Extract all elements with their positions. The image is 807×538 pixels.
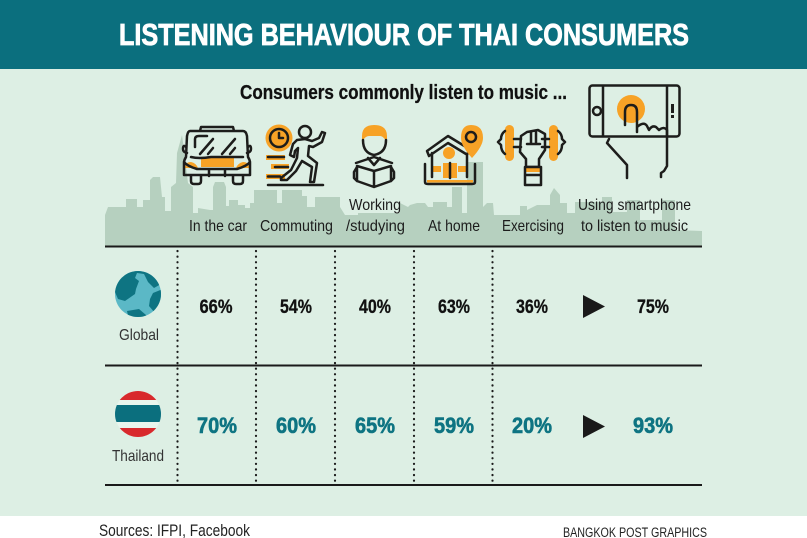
label: thailand: Thailand	[112, 448, 164, 465]
global values row	[200, 297, 669, 318]
icon: car	[183, 127, 251, 184]
thailand values row: 93%	[633, 413, 673, 438]
label: global: Global	[119, 327, 159, 344]
column labels	[189, 197, 691, 235]
thailand values row: 20%	[512, 413, 552, 438]
global values row: 36%	[516, 297, 548, 318]
icon: thailand flag	[115, 391, 161, 437]
column labels: Commuting	[260, 218, 333, 235]
column labels: Exercising	[502, 218, 564, 235]
icon: home with location pin	[425, 125, 483, 184]
arrow: global	[583, 295, 605, 318]
column labels: Working	[349, 197, 401, 214]
column labels: to listen to music	[581, 218, 688, 235]
header banner: LISTENING BEHAVIOUR OF THAI CONSUMERS	[119, 17, 689, 52]
global values row: 66%	[200, 297, 233, 318]
thailand values row	[197, 413, 673, 438]
header banner	[0, 0, 807, 69]
thailand values row: 60%	[276, 413, 316, 438]
icon: commuting runner	[266, 124, 325, 185]
icon: globe	[115, 271, 161, 317]
skyline background	[105, 135, 702, 246]
column labels: /studying	[346, 218, 405, 235]
icon: hand using smartphone	[590, 86, 680, 178]
subheading: Consumers commonly listen to music ...	[240, 82, 567, 104]
icon: person studying with book	[354, 125, 394, 187]
global values row: 40%	[359, 297, 391, 318]
icon: hand lifting dumbbell	[498, 125, 565, 185]
thailand values row: 65%	[355, 413, 395, 438]
global values row: 63%	[438, 297, 470, 318]
column labels: In the car	[189, 218, 248, 235]
global values row: 75%	[637, 297, 669, 318]
global values row: 54%	[280, 297, 312, 318]
column labels: Using smartphone	[578, 197, 691, 214]
thailand values row: 59%	[434, 413, 474, 438]
arrow: thailand	[583, 415, 605, 438]
thailand values row: 70%	[197, 413, 237, 438]
column labels: At home	[428, 218, 480, 235]
